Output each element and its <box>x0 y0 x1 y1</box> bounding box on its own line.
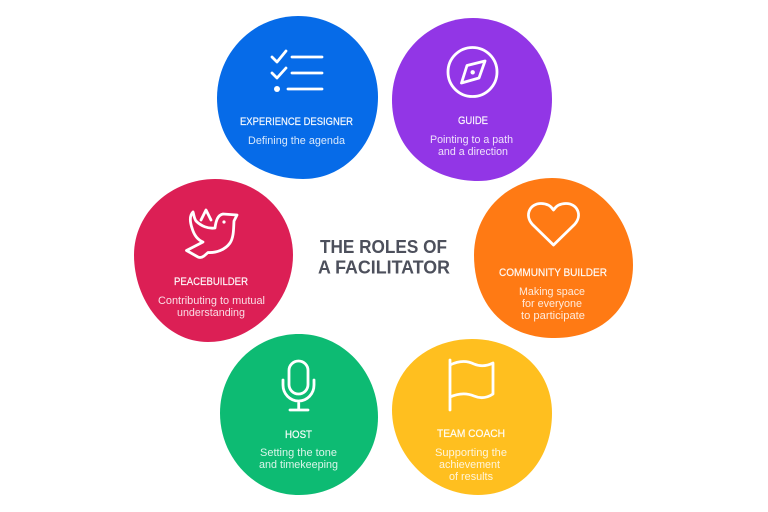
text: pointing to a path: and a direction <box>438 146 508 158</box>
panel: guide <box>392 18 552 181</box>
icon: microphone <box>283 361 314 410</box>
icon: flag <box>450 360 493 410</box>
panel: host <box>220 334 378 495</box>
text: making space for everyone to participate: Making space <box>519 286 585 298</box>
text: making space for everyone to participate: to participate <box>521 310 585 322</box>
icon: heart <box>528 204 579 245</box>
heading: guide: GUIDE <box>458 115 488 127</box>
text: setting the tone and timekeeping: and timekeeping <box>259 459 338 471</box>
icon: checklist <box>272 51 322 92</box>
text: defining the agenda: Defining the agenda <box>248 135 346 147</box>
text: contributing to mutual understanding: Contributing to mutual <box>158 295 265 307</box>
icon: compass <box>448 48 497 96</box>
title: A FACILITATOR <box>318 258 450 278</box>
text: pointing to a path: Pointing to a path <box>430 134 513 146</box>
panel: peacebuilder <box>134 179 293 342</box>
heading: peacebuilder: PEACEBUILDER <box>174 276 248 288</box>
panel: community builder <box>474 178 633 338</box>
text: supporting the achievement of results: of results <box>449 471 493 483</box>
text: making space for everyone to participate: for everyone <box>522 298 582 310</box>
heading: team coach: TEAM COACH <box>437 428 505 440</box>
heading: host: HOST <box>285 429 312 441</box>
heading: community builder: COMMUNITY BUILDER <box>499 267 607 279</box>
text: supporting the achievement of results: Supporting the <box>435 447 507 459</box>
text: setting the tone and timekeeping: Setting the tone <box>260 447 337 459</box>
icon: dove <box>186 210 237 258</box>
heading: experience designer: EXPERIENCE DESIGNER <box>240 116 353 128</box>
panel: team coach <box>392 339 552 495</box>
title: THE ROLES OF <box>320 237 447 257</box>
text: supporting the achievement of results: achievement <box>439 459 500 471</box>
panel: experience designer <box>217 16 378 179</box>
text: contributing to mutual understanding: understanding <box>177 307 245 319</box>
